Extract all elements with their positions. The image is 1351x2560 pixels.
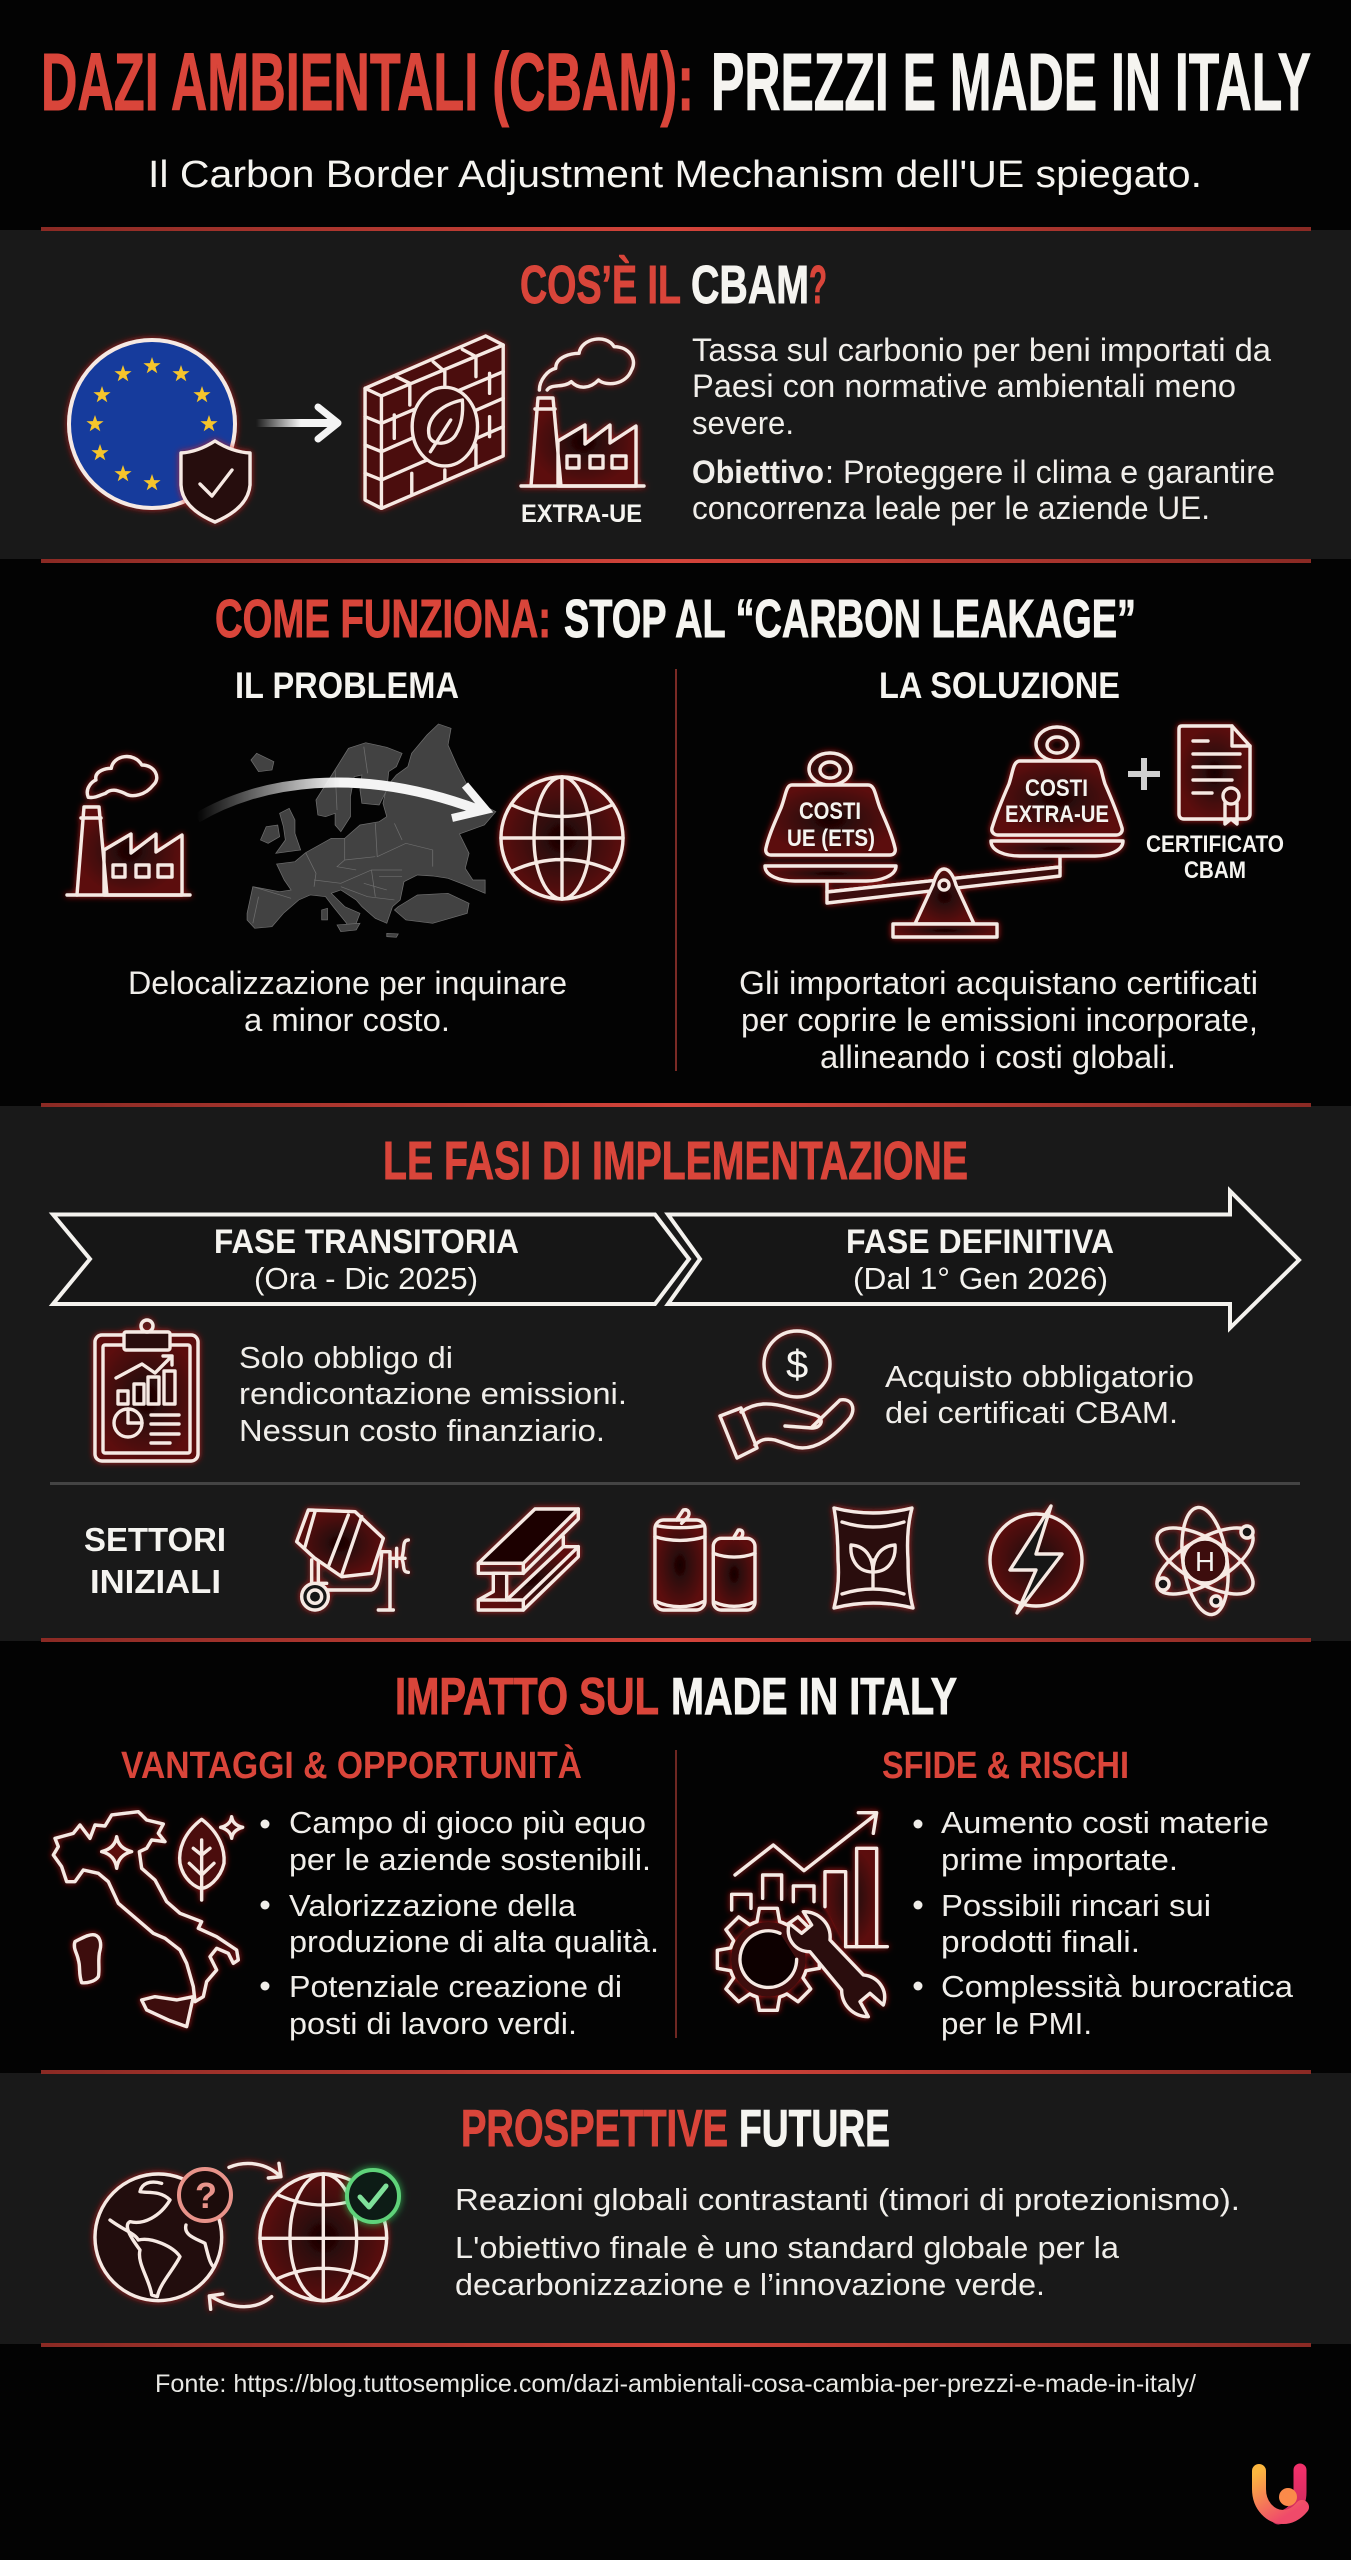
label: certificato CBAM [1146, 831, 1284, 884]
subheading: il problema: IL PROBLEMA [235, 665, 459, 706]
text: definizione CBAM: : Proteggere il clima e garantire [825, 454, 1275, 490]
text: definizione CBAM: concorrenza leale per le aziende UE. [692, 490, 1210, 526]
heading: cos'è il CBAM: CBAM [691, 255, 809, 315]
text: fase definitiva: dei certificati CBAM. [885, 1395, 1178, 1430]
heading: impatto: MADE IN ITALY [671, 1668, 957, 1726]
label: settori iniziali: INIZIALI [90, 1563, 221, 1600]
list: sfide: Complessità burocratica [941, 1969, 1294, 2004]
heading: prospettive: PROSPETTIVE [461, 2100, 728, 2158]
label: certificato CBAM: CBAM [1184, 857, 1246, 884]
icon: cement mixer [297, 1510, 408, 1610]
icon: fertilizer bag [834, 1508, 913, 1608]
arrow: delocalizzazione [197, 782, 486, 818]
icon: scale with weights [765, 727, 1123, 937]
heading: impatto [395, 1668, 957, 1726]
icon: globes with question and check [95, 2163, 399, 2309]
text: definizione CBAM: Paesi con normative ambientali meno [692, 368, 1236, 404]
text: definizione CBAM: severe. [692, 405, 794, 441]
arrow: fase transitoria: (Ora - Dic 2025) [254, 1261, 478, 1296]
text: il problema [128, 965, 567, 1038]
label: settori iniziali: SETTORI [84, 1521, 226, 1558]
text: prospettive: Reazioni globali contrastanti (timori di protezionismo). [455, 2182, 1240, 2217]
subheading: la soluzione: LA SOLUZIONE [879, 665, 1120, 706]
heading: cos'è il CBAM: ? [809, 255, 827, 315]
subheading: vantaggi: VANTAGGI & OPPORTUNITÀ [121, 1743, 582, 1787]
icon: CBAM certificate [1179, 726, 1250, 824]
label: costi UE: COSTI [799, 798, 861, 825]
label: extra-UE: EXTRA-UE [521, 500, 642, 528]
icon: Italy with leaf [53, 1812, 243, 2027]
list: sfide: per le PMI. [941, 2006, 1092, 2041]
icon: factory [67, 757, 190, 895]
panel: cos'è il CBAM [0, 227, 1351, 559]
icon: energy bolt [990, 1506, 1082, 1613]
icon: steel beam [478, 1509, 578, 1610]
heading: come funziona: COME FUNZIONA: [215, 589, 551, 649]
icon: hydrogen atom [1147, 1504, 1263, 1618]
arrow: fase definitiva: (Dal 1° Gen 2026) [853, 1261, 1108, 1296]
subtitle: Il Carbon Border Adjustment Mechanism dell'UE spiegato. [148, 154, 1202, 196]
text: prospettive: decarbonizzazione e l’innovazione verde. [455, 2267, 1045, 2302]
text: la soluzione: per coprire le emissioni incorporate, [741, 1002, 1258, 1038]
icon: aluminium cans [655, 1510, 755, 1610]
icon: hydrogen atom: H [1195, 1546, 1215, 1577]
icon: globe [501, 777, 623, 899]
list: vantaggi: posti di lavoro verdi. [289, 2006, 577, 2041]
list: vantaggi [260, 1805, 659, 2041]
text: definizione CBAM: Tassa sul carbonio per beni importati da [692, 332, 1271, 368]
title: DAZI AMBIENTALI (CBAM): [41, 37, 694, 128]
arrow: fase definitiva: FASE DEFINITIVA [846, 1223, 1114, 1261]
list: sfide [914, 1805, 1294, 2041]
heading: prospettive: FUTURE [739, 2100, 890, 2158]
text: il problema: Delocalizzazione per inquinare [128, 965, 567, 1001]
panel: come funziona [41, 559, 1311, 1075]
heading: le fasi: LE FASI DI IMPLEMENTAZIONE [383, 1131, 968, 1191]
panel: impatto sul made in Italy [41, 1638, 1311, 2041]
text: la soluzione [739, 965, 1258, 1075]
heading: come funziona [215, 589, 1136, 649]
text: la soluzione: Gli importatori acquistano certificati [739, 965, 1258, 1001]
arrow: EU to wall [256, 407, 338, 439]
list: vantaggi: Campo di gioco più equo [289, 1805, 646, 1840]
list: vantaggi: produzione di alta qualità. [289, 1924, 659, 1959]
heading: impatto: IMPATTO SUL [395, 1668, 659, 1726]
label: costi extra-UE: COSTI [1025, 775, 1088, 802]
text: prospettive: L'obiettivo finale è uno standard globale per la [455, 2230, 1120, 2265]
icon: chart, gear and wrench [717, 1813, 887, 2017]
heading: cos'è il CBAM: COS’È IL [520, 255, 681, 315]
label: costi extra-UE: EXTRA-UE [1005, 801, 1109, 828]
panel: fasi di implementazione [0, 1103, 1351, 1641]
logo [1259, 2470, 1302, 2518]
label: costi UE [787, 798, 875, 852]
list: sfide: Possibili rincari sui [941, 1888, 1211, 1923]
text: fase definitiva [885, 1359, 1194, 1430]
text: fase transitoria: Nessun costo finanziario. [239, 1413, 605, 1448]
label: costi extra-UE [1005, 775, 1109, 828]
arrow: fase transitoria [53, 1214, 689, 1304]
label: certificato CBAM: CERTIFICATO [1146, 831, 1284, 858]
icon: globes with question and check: ? [195, 2175, 217, 2216]
label: settori iniziali [84, 1521, 226, 1600]
text: fase transitoria: rendicontazione emissioni. [239, 1376, 627, 1411]
list: sfide: prime importate. [941, 1842, 1178, 1877]
text: definizione CBAM [692, 332, 1275, 526]
icon: EU flag with shield [69, 340, 250, 522]
source line: Fonte: https://blog.tuttosemplice.com/dazi-ambientali-cosa-cambia-per-prezzi-e-made-in-italy/ [155, 2370, 1196, 2398]
list: sfide: Aumento costi materie [941, 1805, 1269, 1840]
map: Europe [247, 724, 496, 937]
list: vantaggi: Potenziale creazione di [289, 1969, 622, 2004]
icon: extra-EU factory [521, 339, 644, 528]
icon: hand with coin: $ [786, 1343, 808, 1387]
text: il problema: a minor costo. [244, 1002, 450, 1038]
text: fase definitiva: Acquisto obbligatorio [885, 1359, 1194, 1394]
subheading: sfide: SFIDE & RISCHI [882, 1745, 1129, 1787]
arrow: fase definitiva [668, 1191, 1299, 1328]
list: sfide: prodotti finali. [941, 1924, 1140, 1959]
list: vantaggi: Valorizzazione della [289, 1888, 577, 1923]
text: fase transitoria: Solo obbligo di [239, 1340, 453, 1375]
icon: clipboard report [95, 1320, 198, 1461]
icon: plus [1128, 758, 1160, 790]
label: costi UE: UE (ETS) [787, 825, 875, 852]
text: definizione CBAM: Obiettivo [692, 454, 824, 490]
icon: hand with coin [720, 1331, 853, 1458]
text: prospettive [455, 2182, 1240, 2302]
list: vantaggi: per le aziende sostenibili. [289, 1842, 651, 1877]
icon: brick wall with leaf [365, 336, 503, 508]
arrow: fase transitoria: FASE TRANSITORIA [214, 1223, 519, 1261]
text: fase transitoria [239, 1340, 627, 1448]
text: la soluzione: allineando i costi globali. [820, 1039, 1176, 1075]
panel: prospettive future [0, 2070, 1351, 2347]
